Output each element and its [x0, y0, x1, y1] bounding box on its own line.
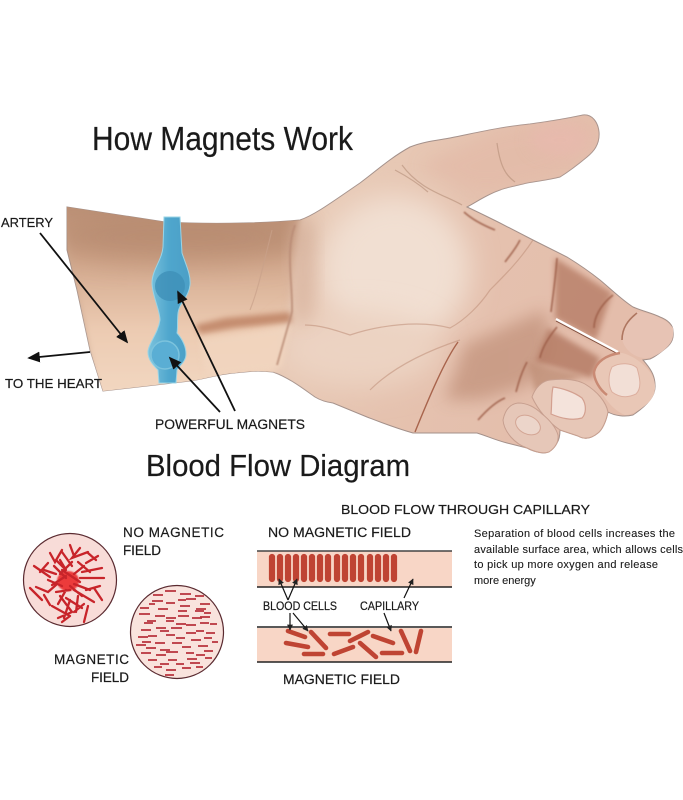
white gap between fingers: [556, 319, 618, 352]
capillary: magnetic field: [257, 627, 452, 662]
circle: magnetic field: [130, 586, 224, 678]
ring finger: [532, 379, 608, 438]
capillary label: CAPILLARY: [360, 601, 419, 613]
magnet arrow lower: [170, 358, 220, 412]
to the heart label: TO THE HEART: [5, 376, 102, 391]
shadowed inner palm: [445, 310, 552, 400]
explanation text: to pick up more oxygen and release: [474, 559, 658, 571]
no magnetic field capillary label: NO MAGNETIC FIELD: [268, 525, 411, 540]
circle: no magnetic field: [24, 534, 116, 626]
no magnetic field label: FIELD: [123, 543, 161, 558]
explanation text: available surface area, which allows cells: [474, 544, 683, 556]
title: How Magnets Work: [92, 120, 353, 157]
magnet arrow upper: [178, 292, 235, 411]
hand and forearm photo illustration: [50, 115, 673, 453]
powerful magnets label: POWERFUL MAGNETS: [155, 417, 305, 432]
blood flow heading: Blood Flow Diagram: [146, 448, 410, 483]
capillary: no magnetic field: [257, 551, 452, 587]
explanation text: Separation of blood cells increases the: [474, 528, 675, 540]
wrist heel shadow: [291, 215, 315, 325]
forearm shading: [67, 207, 301, 391]
wristband with magnets: [148, 217, 190, 383]
blood cells label: BLOOD CELLS: [263, 601, 337, 613]
magnetic field capillary label: MAGNETIC FIELD: [283, 672, 400, 687]
infographic canvas: [0, 114, 683, 684]
artery arrow: [40, 233, 127, 342]
middle finger: [594, 353, 655, 415]
thumb tone: [420, 118, 595, 190]
palm creases: [305, 240, 533, 390]
to the heart arrow: [29, 352, 90, 358]
index fingertip: [622, 312, 673, 358]
scattered blood cells: [286, 631, 421, 657]
magnet upper: [155, 271, 185, 301]
magnet lower: [151, 341, 179, 369]
capillary heading: BLOOD FLOW THROUGH CAPILLARY: [341, 502, 590, 517]
capillary pointer arrows: [279, 579, 413, 631]
magnetic field label: FIELD: [91, 670, 129, 685]
palm highlight: [320, 195, 470, 345]
magnetic field label: MAGNETIC: [54, 652, 129, 667]
explanation text: more energy: [474, 575, 536, 587]
wrist crease shadow: [195, 312, 292, 334]
artery label: ARTERY: [1, 215, 53, 230]
aligned blood cells: [272, 557, 394, 579]
no magnetic field label: NO MAGNETIC: [123, 525, 224, 540]
little finger: [503, 403, 558, 453]
